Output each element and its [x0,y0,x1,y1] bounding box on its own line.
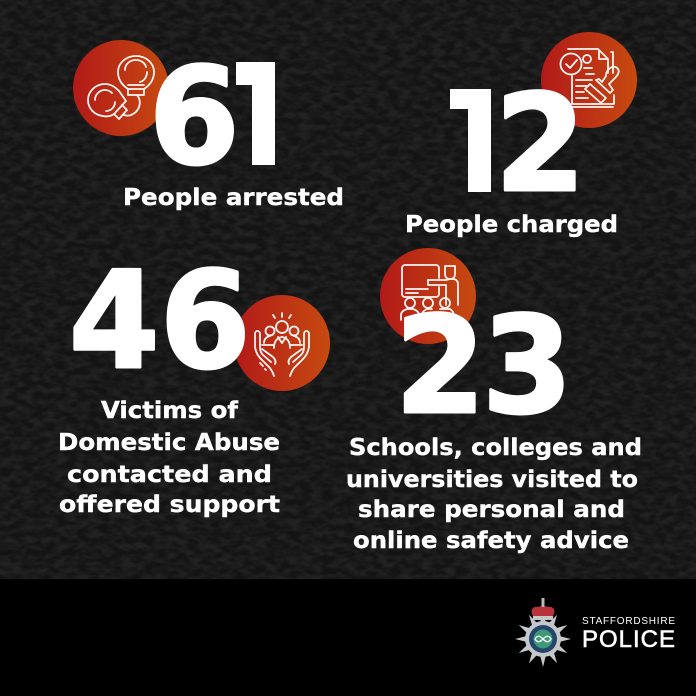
label: Victims of Domestic Abuse contacted and offered support: offered support [59,492,280,518]
stat number: 46: 4 [69,244,159,399]
stat number: 12: 1 [425,69,515,221]
stat number: 46 [69,244,250,399]
footer band [0,579,696,696]
stat number: 46: 6 [160,244,250,399]
logo text: Staffordshire Police: STAFFORDSHIRE [582,616,675,627]
stat number: 23: 2 [395,289,485,444]
icon: hands holding people in red circle [234,295,330,391]
label: Victims of Domestic Abuse contacted and offered support [58,398,280,518]
label: Schools, colleges and universities visited to share personal and online safety advice: online safety advice [353,528,629,554]
stat number: 61: 1 [210,42,300,194]
label: Schools, colleges and universities visited to share personal and online safety advice: share personal and [358,497,625,523]
label: Victims of Domestic Abuse contacted and offered support: Victims of [101,398,239,424]
stat number: 23: 3 [482,289,572,444]
label: Victims of Domestic Abuse contacted and offered support: Domestic Abuse [58,430,280,456]
stat number: 12 [450,89,576,192]
stat number: 12: 2 [495,67,585,222]
icon: police badge [515,598,571,667]
icon: handcuffs in red circle [73,40,169,136]
label: Schools, colleges and universities visited to share personal and online safety advice: universities visited to [346,467,638,493]
icon: document and stamp in red circle [541,32,637,128]
label: People arrested: People arrested [123,185,344,211]
label: People charged: People charged [405,212,618,238]
icon: teacher and students in red circle [380,248,476,344]
logo text: Staffordshire Police: POLICE [582,626,675,653]
stat number: 23 [395,289,572,444]
label: Schools, colleges and universities visited to share personal and online safety advice [346,435,642,554]
label: Victims of Domestic Abuse contacted and offered support: contacted and [67,462,272,488]
stat number: 61 [156,62,275,166]
stat number: 61: 6 [149,40,239,195]
label: Schools, colleges and universities visited to share personal and online safety advice: Schools, colleges and [349,435,642,461]
